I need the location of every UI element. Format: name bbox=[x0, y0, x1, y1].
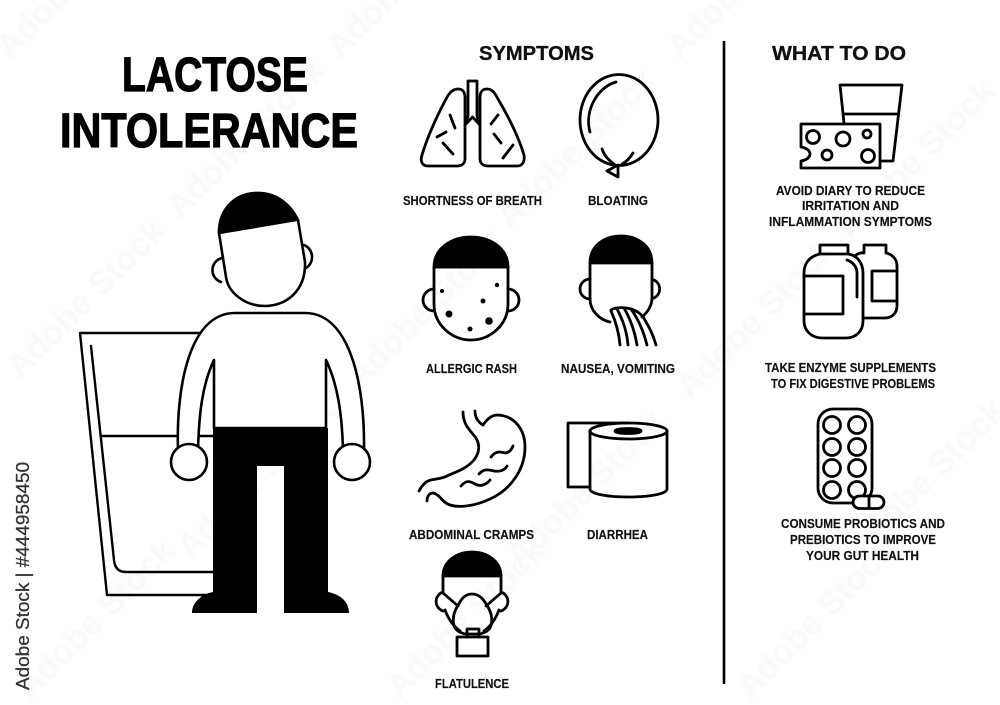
icon: head with gas mask bbox=[436, 552, 508, 656]
watermark pattern: Adobe Stock bbox=[729, 532, 903, 705]
watermark pattern: Adobe Stock bbox=[499, 402, 673, 576]
label: nausea, vomiting: NAUSEA, VOMITING bbox=[561, 362, 675, 376]
text: enzyme supplements advice bbox=[765, 361, 936, 391]
text: probiotics advice: CONSUME PROBIOTICS AND bbox=[781, 517, 945, 531]
watermark pattern: Adobe Stock bbox=[169, 392, 343, 566]
divider line bbox=[723, 41, 725, 684]
icon: balloon bbox=[580, 74, 658, 177]
text: enzyme supplements advice: TAKE ENZYME SUPPLEMENTS bbox=[765, 361, 936, 375]
icon: supplement bottles bbox=[804, 245, 897, 338]
text: probiotics advice: PREBIOTICS TO IMPROVE bbox=[790, 533, 936, 547]
icon: stomach bbox=[419, 411, 525, 506]
watermark pattern: Adobe Stock bbox=[669, 232, 843, 406]
title bbox=[60, 49, 358, 158]
watermark pattern: Adobe Stock bbox=[159, 52, 333, 226]
text: avoid dairy advice: INFLAMMATION SYMPTOMS bbox=[769, 215, 932, 229]
man: right hand bbox=[334, 444, 370, 480]
label: flatulence: FLATULENCE bbox=[435, 677, 509, 691]
text: probiotics advice: YOUR GUT HEALTH bbox=[806, 549, 919, 563]
text: enzyme supplements advice: TO FIX DIGESTIVE PROBLEMS bbox=[771, 377, 935, 391]
text: probiotics advice bbox=[781, 517, 945, 563]
illustration: standing man bbox=[171, 193, 370, 613]
man: ears bbox=[212, 245, 312, 282]
watermark pattern: Adobe Stock bbox=[339, 222, 513, 396]
watermark pattern: Adobe Stock bbox=[489, 62, 663, 236]
icon: face with allergic rash bbox=[423, 237, 519, 340]
text: avoid dairy advice: AVOID DIARY TO REDUCE bbox=[776, 184, 925, 198]
title: INTOLERANCE bbox=[60, 105, 358, 158]
stock image credit: Adobe Stock | #444958450 bbox=[13, 462, 33, 690]
label: allergic rash: ALLERGIC RASH bbox=[426, 362, 517, 376]
watermark pattern: Adobe Stock bbox=[379, 532, 553, 705]
watermark pattern: Adobe Stock bbox=[9, 532, 183, 705]
man: torso and arms bbox=[178, 313, 364, 450]
text: avoid dairy advice: IRRITATION AND bbox=[802, 199, 899, 213]
man: trousers bbox=[192, 428, 349, 613]
icon: cheese and glass of milk bbox=[801, 85, 902, 168]
icon: toilet paper roll bbox=[568, 423, 667, 497]
icon: lungs bbox=[421, 81, 524, 166]
icon: head vomiting bbox=[580, 236, 660, 345]
heading: what to do: WHAT TO DO bbox=[772, 43, 906, 65]
text: avoid dairy advice bbox=[769, 184, 932, 229]
man: left hand bbox=[171, 444, 207, 480]
title: LACTOSE bbox=[122, 49, 308, 102]
label: abdominal cramps: ABDOMINAL CRAMPS bbox=[409, 528, 534, 542]
illustration: large glass of milk bbox=[80, 333, 215, 595]
label: diarrhea: DIARRHEA bbox=[587, 528, 648, 542]
man: head and hair bbox=[219, 193, 305, 306]
icon: blister pack and capsule bbox=[818, 409, 884, 508]
watermark pattern: Adobe Stock bbox=[0, 212, 173, 386]
label: bloating: BLOATING bbox=[588, 194, 648, 208]
heading: symptoms: SYMPTOMS bbox=[479, 43, 594, 65]
label: shortness of breath: SHORTNESS OF BREATH bbox=[403, 194, 542, 208]
watermark pattern: Adobe Stock bbox=[829, 72, 1000, 246]
